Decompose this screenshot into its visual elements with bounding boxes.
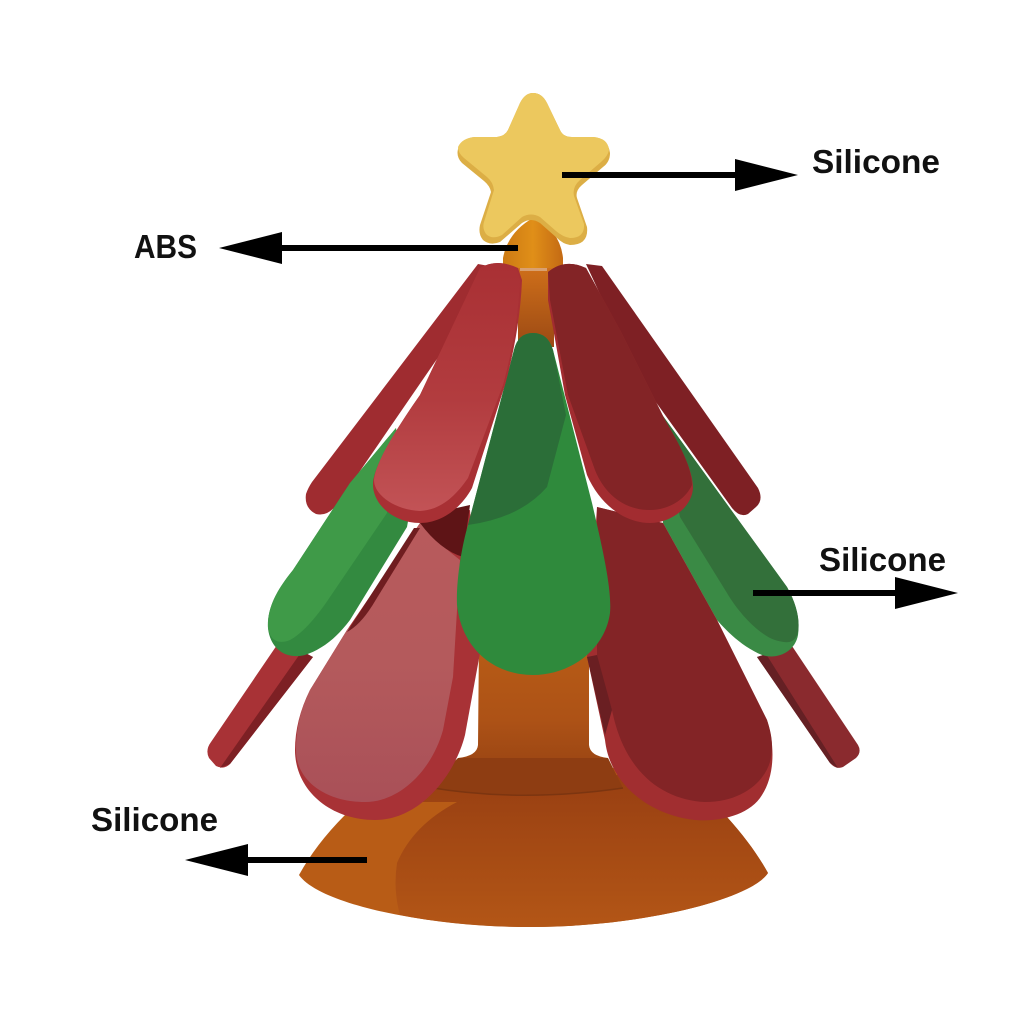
centre green leaf [457, 333, 610, 675]
central stem [458, 218, 608, 758]
upper red leaf: left [373, 263, 522, 523]
upper red leaf: right [548, 264, 693, 523]
star [458, 93, 610, 245]
arrow: star to Silicone [562, 159, 798, 191]
thin red branches [207, 264, 860, 768]
suction cup base [299, 758, 768, 927]
lower red leaf: right [587, 507, 772, 820]
lower red leaf: left [295, 505, 480, 820]
arrow: ABS [219, 232, 518, 264]
label: Silicone bottom: Silicone [91, 801, 218, 838]
side green leaf: left [268, 428, 410, 656]
label: Silicone right: Silicone [819, 541, 946, 578]
arrow: base to Silicone [185, 844, 367, 876]
side green leaf: right [655, 405, 799, 656]
arrow: green leaf to Silicone [753, 577, 958, 609]
label: Silicone top: Silicone [812, 143, 940, 180]
label: ABS: ABS [134, 228, 197, 265]
